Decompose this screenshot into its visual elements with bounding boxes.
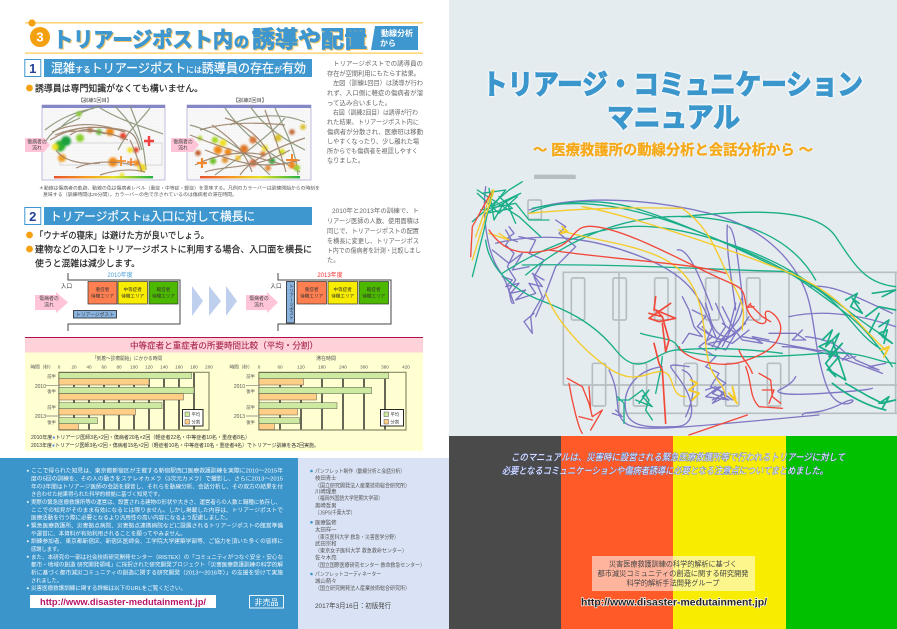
panel: credits: 奥崎哲男 xyxy=(315,502,337,510)
notes text: 緊急医療救護所、災害拠点病院、災害拠点連携病院などに設置されるトリアージポストの館営準備 xyxy=(31,522,284,530)
panel: credits: 武田宗和 xyxy=(315,540,337,548)
floor diagram: 2010: 待機エリア xyxy=(121,292,145,300)
icon: number 3: 3 xyxy=(36,30,44,44)
floor plan xyxy=(528,175,897,413)
legend xyxy=(182,410,203,426)
URL box: http://www.disaster-medutainment.jp/ xyxy=(40,596,206,607)
floor diagram: 2010: 入口 xyxy=(61,283,72,290)
notes text: 医療活動を行う際に必要となるより汎用性の高い内容になるよう配慮しました。 xyxy=(31,514,231,522)
credit box xyxy=(592,556,755,591)
panel: credits: 枝田青士 xyxy=(315,474,337,482)
cover subtitle: ～ 医療救護所の動線分析と会話分析から ～ xyxy=(533,141,813,159)
bar chart: arrival to start of treatment: 後半 xyxy=(47,419,57,426)
section title xyxy=(25,19,423,54)
cover background xyxy=(449,0,897,436)
bar chart: arrival to start of treatment: 前半 xyxy=(47,404,57,411)
floor diagram: 2013: トリアージポスト xyxy=(288,284,293,320)
bar chart: stay time: 後半 xyxy=(246,419,256,426)
badge: 動線分析から xyxy=(371,26,418,50)
credit box: 都市減災コミュニティの創造に関する研究開発 xyxy=(598,569,749,578)
yellow traces xyxy=(472,190,889,403)
arrows: 2010 to 2013 xyxy=(192,286,237,316)
panel: credits: 太田祥一 xyxy=(315,526,337,534)
bullets: section 2: 建物などの入口をトリアージポストに利用する場合、入口面を横長に xyxy=(35,244,312,254)
notes text: 災害医療救護訓練に関する詳細は以下のURLをご覧ください。 xyxy=(31,584,186,592)
cover title xyxy=(482,69,863,133)
arrow: 傷病者の流れ (day 1) xyxy=(25,138,50,152)
bar chart: arrival to start of treatment: 80 xyxy=(116,364,122,370)
panel: time comparison xyxy=(25,337,423,451)
bar chart: stay time xyxy=(230,355,410,430)
text block: section 2 explanation: を横長に変更し、トリアージポス xyxy=(327,236,419,245)
band: grey xyxy=(449,436,561,629)
bar chart: arrival to start of treatment: 「到着～診療開始」にかかる時間 xyxy=(92,355,162,362)
floor diagram: 2013: 中等症者 xyxy=(334,286,352,293)
bar chart: arrival to start of treatment: 140 xyxy=(160,364,168,370)
notes text: ここで得られた知見は、東京都新宿区が主催する新宿駅西口医療救護訓練を実際に2010～2015年 xyxy=(31,467,284,475)
heat map: training day 1 xyxy=(42,105,165,180)
text block: section 1 explanation: 右図（訓練2回目）は誘導が行わ xyxy=(333,108,418,116)
notes text: 度の5回の訓練を、その人の動きをステレオカメラ（3次元カメラ）で撮影し、さらに2013～2015 xyxy=(31,474,283,482)
notes text: 析に基づく都市減災コミュニティの創造に関する研究開発（2013～2016年）」の支援を受けて実施 xyxy=(31,568,284,576)
bar chart: stay time: 420 xyxy=(402,364,410,370)
floor diagram: 2010: 重症者 xyxy=(96,286,110,293)
panel: credits: （国立国際医療研究センター 救命救急センター） xyxy=(315,561,425,569)
panel: credits: （福岡外国語大学短期大学部） xyxy=(315,494,383,502)
band: red/orange xyxy=(561,436,673,629)
legend: 分割 xyxy=(390,418,400,426)
section 2 heading xyxy=(25,207,312,225)
arrow: 傷病者の流れ (day 2): 流れ xyxy=(178,144,188,152)
floor diagram: 2013: 軽症者 xyxy=(367,286,381,293)
bar chart: stay time: 2010 xyxy=(234,384,245,390)
issue date: 2017年3月16日：初版発行 xyxy=(315,601,391,610)
bar chart: stay time: 360 xyxy=(381,364,389,370)
floor diagram: 2010: 待機エリア xyxy=(91,292,114,300)
bar chart: arrival to start of treatment: 160 xyxy=(175,364,183,370)
floor diagram: 2013: 入口 xyxy=(270,283,282,290)
text block: section 2 explanation: た。 xyxy=(327,256,340,264)
section 2 heading: トリアージポストは入口に対して横長に xyxy=(50,210,255,224)
label: 非売品: 非売品 xyxy=(254,597,278,607)
arrow: 傷病者の流れ (day 1): 傷病者の xyxy=(27,138,47,146)
heading text xyxy=(53,26,367,52)
cover title: トリアージ・コミュニケーション xyxy=(482,69,863,100)
floor diagram: 2013: 待機エリア xyxy=(362,292,386,300)
panel: credits: （JSPS/千葉大学） xyxy=(315,508,355,516)
section 1 heading: 混雑するトリアージポストには誘導員の存在が有効 xyxy=(51,60,306,76)
text block: section 1 explanation: 傷病者が分散され、医療班は移動 xyxy=(327,127,423,136)
bar chart: stay time: 180 xyxy=(318,364,326,370)
panel: notes (blue) xyxy=(0,458,298,629)
notes text: や運営に、本資料が有効利用されることを願ってやみません。 xyxy=(31,529,186,537)
cover description: このマニュアルは、災害時に設営される緊急医療救護所等で行われるトリアージに対して xyxy=(511,452,846,464)
band: green xyxy=(786,436,897,629)
note under heat maps: ＊動線は傷病者の軌跡、動線の色は傷病者レベル（重症・中等症・軽症）を意味する。凡例のカラーバーは訓練開始からの時刻を xyxy=(39,184,320,192)
bar chart: arrival to start of treatment: 前半 xyxy=(47,373,57,380)
cover URL: http://www.disaster-medutainment.jp/ xyxy=(581,598,767,608)
text block: section 1 explanation: 存在が空間利用にもたらす結果。 xyxy=(327,68,420,78)
bar chart: arrival to start of treatment: 2010 xyxy=(35,384,46,390)
cover title: マニュアル xyxy=(607,102,740,133)
bar chart: arrival to start of treatment: 後半 xyxy=(47,388,57,395)
bar chart: stay time: 後半 xyxy=(246,388,256,395)
notes text: ここでの知見がそのまま有効になるとは限りません。しかし掲載した内容は、トリアージポストで xyxy=(31,506,284,514)
cover description xyxy=(502,452,846,477)
notes text: されました。 xyxy=(31,577,62,584)
heat map: training day 2 xyxy=(187,105,311,180)
heading text: の xyxy=(234,34,249,51)
bar chart: arrival to start of treatment: 60 xyxy=(101,364,107,370)
panel: credits: （東京女子医科大学 救急救命センター） xyxy=(315,546,407,554)
bar chart: arrival to start of treatment: 20 xyxy=(71,364,77,370)
legend xyxy=(380,410,404,426)
floor diagram: 2010: 軽症者 xyxy=(157,286,171,293)
bar chart: arrival to start of treatment: 120 xyxy=(145,364,153,370)
arrow: 傷病者の流れ (day 1): 流れ xyxy=(32,144,42,152)
floor diagram: 2010: トリアージポスト xyxy=(76,311,114,318)
notes text: 年の3年間はトリアージ医師の会話を録音し、それらを動線分析、会話分析し、その双方の結果を付 xyxy=(31,482,284,490)
bar chart: arrival to start of treatment: 2013 xyxy=(35,414,46,420)
red traces xyxy=(471,193,782,435)
section 1 heading: 1 xyxy=(29,61,36,76)
text block: section 1 explanation: なりました。 xyxy=(327,156,364,164)
label: 非売品 xyxy=(250,596,284,608)
caption: 訓練1回目: 【訓練1回目】 xyxy=(78,96,112,104)
panel: credits: （東京医科大学 救急・災害医学分野） xyxy=(315,533,399,541)
text block: section 1 explanation: 所からでも傷病者を視認しやすく xyxy=(327,146,418,155)
badge: 動線分析から: から xyxy=(380,39,396,48)
legend: 分割 xyxy=(192,418,201,426)
section 1 heading xyxy=(25,59,312,77)
bullets: section 2: 「ウナギの寝床」は避けた方が良いでしょう。 xyxy=(35,230,209,240)
floor diagram: 2013 xyxy=(246,271,391,331)
floor diagram: 2013: 重症者 xyxy=(305,286,319,293)
heading text: 誘導や配置 xyxy=(252,26,367,52)
panel: credits: パンフレットコーディネーター xyxy=(315,570,381,578)
chart footnote: 2013年度●トリアージ医師3名×2回・傷病者15名×2回（軽症者10名・中等症者10名・重症者4名）でトリアージ訓練を各2回実施。 xyxy=(31,441,319,449)
panel heading: 中等症者と重症者の所要時間比較（平均・分割） xyxy=(130,340,318,350)
bullets: section 2 xyxy=(26,230,312,268)
notes text: 訓練参加者、東京都新宿区、新宿区医師会、工学院大学建築学部等、ご協力を頂いた多くの皆様に xyxy=(31,537,283,545)
text block: section 2 explanation: ト内での傷病者を計測・比較しまし xyxy=(327,246,421,254)
text block: section 1 explanation: しやすくなったり、少し離れた場 xyxy=(327,136,420,146)
icon: number 3 xyxy=(28,19,50,47)
bar chart: stay time: 60 xyxy=(277,364,283,370)
bar chart: arrival to start of treatment: 0 xyxy=(58,364,61,370)
section 2 heading: 2 xyxy=(29,209,36,224)
cover description: 必要となるコミュニケーションや傷病者誘導に必要となる注意点についてまとめました。 xyxy=(502,465,828,477)
bar chart: arrival to start of treatment: 180 xyxy=(190,364,198,370)
bar chart: stay time: 前半 xyxy=(246,404,256,411)
text block: section 2 explanation xyxy=(327,207,421,264)
bullets: section 2: 使うと混雑は減少します。 xyxy=(35,258,140,268)
notes text: また、本研究の一部は社会技術研究開発センター（RISTEX）の「コミュニティがつなぐ安全・安心な xyxy=(31,553,283,561)
legend: 平均 xyxy=(390,411,400,418)
bar chart: arrival to start of treatment: 時間（秒） xyxy=(31,364,53,370)
bar chart: stay time: 滞在時間 xyxy=(316,355,336,362)
notes text: 都市・地域の創造 研究開発領域」に採択された研究開発プロジェクト「災害医療救護訓練の科学的解 xyxy=(31,561,283,569)
panel: credits: 医療監修 xyxy=(315,518,337,526)
text block: section 2 explanation: リアージ医師の人数、使用面積は xyxy=(327,216,419,225)
text block: section 2 explanation: 同じで、トリアージポストの配置 xyxy=(327,227,420,235)
credit box: 災害医療救護訓練の科学的解析に基づく xyxy=(609,560,737,568)
bar chart: stay time: 2013 xyxy=(234,414,245,420)
floor diagram: 2010: 中等症者 xyxy=(124,286,142,293)
green traces xyxy=(472,182,896,423)
floor diagram: 2010 xyxy=(35,271,180,331)
bar chart: arrival to start of treatment: 100 xyxy=(130,364,138,370)
floor diagram: 2013: 待機エリア xyxy=(300,292,324,300)
chart footnote: 2010年度●トリアージ医師3名×2回・傷病者20名×2回（軽症者22名・中等症者10名・重症者8名） xyxy=(31,433,250,441)
bar chart: stay time: 120 xyxy=(297,364,305,370)
bar chart: stay time: 240 xyxy=(339,364,347,370)
floor diagram: 2010: 待機エリア xyxy=(152,292,175,300)
text block: section 2 explanation: 2010年と2013年の訓練で、ト xyxy=(332,207,419,215)
text block: section 1 explanation: れた結果、トリアージポスト内に xyxy=(327,117,419,126)
panel: credits: （国立研究開発法人産業技術総合研究所） xyxy=(315,482,410,490)
bar chart: arrival to start of treatment xyxy=(31,355,213,430)
arrow: 傷病者の流れ (day 2): 傷病者の xyxy=(173,138,193,146)
notes text: 感謝します。 xyxy=(31,545,62,553)
text block: section 1 explanation: 左図（訓練1回目）は誘導が行わ xyxy=(333,78,423,87)
text block: section 1 explanation: って込み合いました。 xyxy=(327,98,391,107)
badge: 動線分析から: 動線分析 xyxy=(381,28,413,38)
chart: patient movement trajectories xyxy=(471,175,897,435)
panel: credits: 城山萌々 xyxy=(315,577,337,585)
text block: section 1 explanation: トリアージポストでの誘導員の xyxy=(333,58,423,68)
floor diagram: 2013: 待機エリア xyxy=(331,292,355,300)
text block: section 1 explanation xyxy=(327,58,423,164)
notes text: き合わせた結果得られた科学的根拠に基づく知見です。 xyxy=(31,490,163,498)
bar chart: stay time: 前半 xyxy=(246,373,256,380)
note under heat maps: 意味する（訓練時間は20分間）。カラーバーの色で示されているのは傷病者の滞在時間。 xyxy=(43,191,237,198)
panel: credits xyxy=(298,458,449,629)
band: yellow xyxy=(673,436,786,629)
floor diagram: 2010: 傷病者の xyxy=(39,295,59,302)
purple traces xyxy=(484,187,896,428)
text block: section 1 explanation: れず、入口側に軽症の傷病者が溜 xyxy=(327,88,423,97)
panel: credits: 川崎理恵 xyxy=(315,488,337,496)
panel: credits: 佐々木亮 xyxy=(315,554,337,562)
chart footnote xyxy=(31,433,319,449)
bullet: 誘導員: 誘導員は専門知識がなくても構いません。 xyxy=(35,82,203,94)
note under heat maps xyxy=(39,184,320,198)
bar chart: stay time: 時間（秒） xyxy=(230,364,252,370)
panel: credits: （国立研究開発法人産業技術総合研究所） xyxy=(315,584,410,592)
legend: 平均 xyxy=(192,411,201,418)
notes text xyxy=(27,467,284,592)
notes text: 実際の緊急医療救護所等の運営は、設置される建物の形状や大きさ、運営者らの人数と職種に依存し、 xyxy=(31,498,281,506)
caption: 訓練2回目: 【訓練2回目】 xyxy=(233,96,267,104)
floor diagram: 2010: 2010年度 xyxy=(107,271,133,279)
bar chart: stay time: 300 xyxy=(360,364,368,370)
bar chart: stay time: 0 xyxy=(258,364,261,370)
credit box: 科学的解析手法開発グループ xyxy=(626,578,720,588)
bar chart: arrival to start of treatment: 200 xyxy=(205,364,213,370)
floor diagram: 2013: 流れ xyxy=(254,302,264,308)
arrow: 傷病者の流れ (day 2) xyxy=(171,138,199,152)
heading text: トリアージポスト内 xyxy=(53,29,233,52)
bar chart: arrival to start of treatment: 40 xyxy=(86,364,92,370)
floor diagram: 2013: 傷病者の xyxy=(249,295,269,302)
floor diagram: 2010: 流れ xyxy=(44,302,54,308)
panel: credits: パンフレット制作（動線分析と会話分析） xyxy=(315,467,405,475)
floor diagram: 2013: 2013年度 xyxy=(317,271,343,279)
